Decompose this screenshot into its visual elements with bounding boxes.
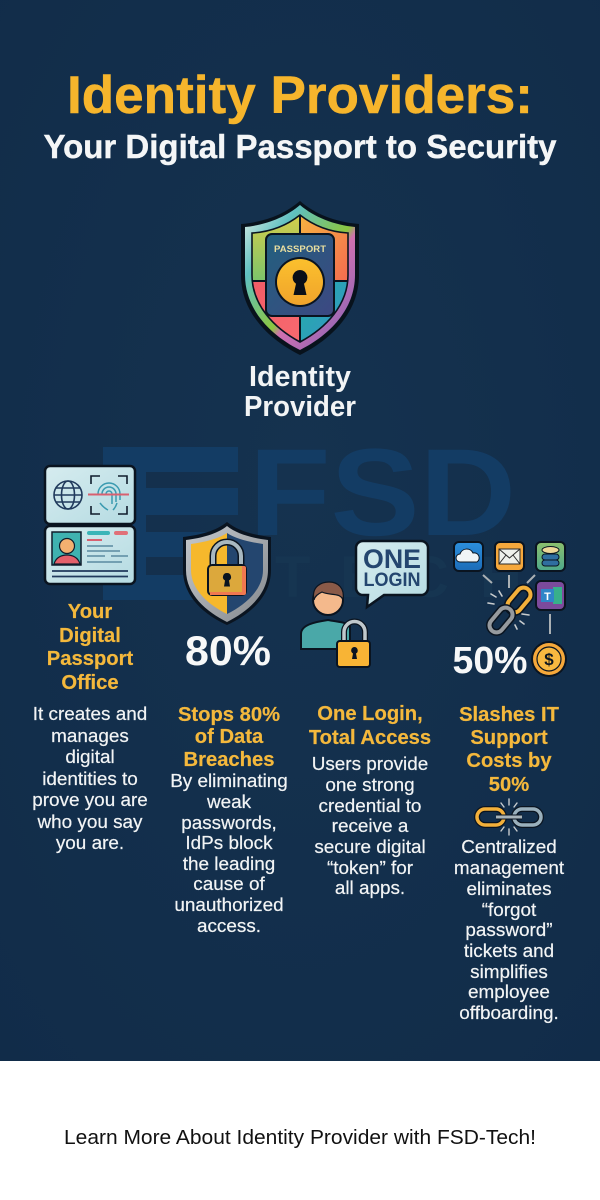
text: IT costs description: “forgot [482, 900, 537, 921]
heading: Slashes IT Support Costs by 50%: 50% [489, 774, 529, 796]
text: IT costs description: tickets and [464, 941, 554, 962]
text: one login description: one strong [325, 775, 415, 796]
heading: One Login, Total Access: One Login, [317, 703, 423, 725]
heading: Slashes IT Support Costs by 50% [459, 704, 560, 796]
heading: Identity Provider [244, 361, 356, 423]
title [44, 66, 557, 165]
icon: dollar coin [531, 641, 567, 677]
text: one login description [312, 754, 428, 899]
text: breaches description: access. [197, 916, 261, 937]
text: one login description: receive a [332, 816, 409, 837]
icon: rainbow passport shield [241, 201, 359, 355]
text: IT costs description: management [454, 858, 565, 879]
text: passport office description: It creates and [33, 704, 147, 725]
footer band [0, 1061, 600, 1200]
text: IT costs description: password” [465, 920, 553, 941]
icon: dollar coin: $ [544, 650, 554, 669]
text: breaches description: weak [206, 792, 252, 813]
text: one login description: credential to [319, 796, 421, 817]
text: passport office description: who you say [36, 812, 143, 833]
text: passport office description: identities to [42, 769, 138, 790]
icon: one login speech bubble [356, 541, 428, 607]
watermark: FSD Tech logo [103, 424, 522, 610]
icon: security shield with padlock [183, 522, 271, 625]
stat: 50%: 50% [452, 640, 528, 682]
heading: Your Digital Passport Office: Your [68, 601, 112, 623]
icon: connected app tiles: T [544, 591, 551, 603]
text: one login description: all apps. [335, 878, 405, 899]
heading: Stops 80% of Data Breaches [178, 704, 280, 771]
text: breaches description [170, 771, 288, 937]
text: passport office description: prove you are [32, 790, 148, 811]
text: breaches description: passwords, [181, 813, 277, 834]
heading: Your Digital Passport Office [47, 601, 133, 694]
text: IT costs description: eliminates [466, 879, 552, 900]
heading: Stops 80% of Data Breaches: Breaches [184, 749, 274, 771]
text: IT costs description: simplifies [470, 962, 548, 983]
title: Your Digital Passport to Security [44, 128, 557, 165]
text: passport office description [32, 704, 148, 854]
text: breaches description: unauthorized [174, 895, 284, 916]
watermark: FSD Tech logo: TECH [275, 545, 522, 610]
heading: Identity Provider: Provider [244, 391, 356, 423]
icon: rainbow passport shield: PASSPORT [274, 244, 326, 255]
text: passport office description: manages [51, 726, 129, 747]
heading: Identity Provider: Identity [249, 361, 351, 393]
text: one login description: Users provide [312, 754, 428, 775]
watermark: FSD Tech logo: FSD [249, 424, 516, 562]
heading: Stops 80% of Data Breaches: of Data [195, 726, 264, 748]
text: breaches description: cause of [193, 874, 265, 895]
text: breaches description: IdPs block [185, 833, 273, 854]
text: IT costs description: Centralized [461, 837, 557, 858]
text: breaches description: the leading [183, 854, 275, 875]
text: passport office description: digital [65, 747, 115, 768]
icon: horizontal chain link [477, 799, 541, 835]
icon: one login speech bubble: LOGIN [364, 570, 420, 591]
text: one login description: secure digital [314, 837, 426, 858]
heading: Your Digital Passport Office: Digital [59, 625, 121, 647]
text: one login description: “token” for [327, 858, 413, 879]
heading: One Login, Total Access [309, 703, 431, 749]
icon: connected app tiles [454, 542, 565, 634]
icon: passport pages [45, 466, 135, 584]
heading: Your Digital Passport Office: Office [61, 672, 119, 694]
text: breaches description: By eliminating [170, 771, 288, 792]
text: IT costs description: offboarding. [459, 1003, 559, 1024]
heading: Slashes IT Support Costs by 50%: Costs by [466, 750, 552, 772]
icon: user with padlock [301, 582, 370, 667]
text: IT costs description: employee [468, 982, 550, 1003]
footer text: Learn More About Identity Provider with FSD-Tech! [64, 1127, 536, 1149]
text: passport office description: you are. [56, 833, 124, 854]
title: Identity Providers: [67, 66, 533, 125]
icon: broken chain link [487, 585, 533, 635]
heading: Slashes IT Support Costs by 50%: Slashes IT [459, 704, 560, 726]
heading: One Login, Total Access: Total Access [309, 727, 431, 749]
stat: 80%: 80% [185, 627, 271, 674]
heading: Stops 80% of Data Breaches: Stops 80% [178, 704, 280, 726]
text: IT costs description [454, 837, 565, 1024]
heading: Slashes IT Support Costs by 50%: Support [470, 727, 548, 749]
heading: Your Digital Passport Office: Passport [47, 648, 133, 670]
icon: one login speech bubble: ONE [363, 544, 421, 574]
